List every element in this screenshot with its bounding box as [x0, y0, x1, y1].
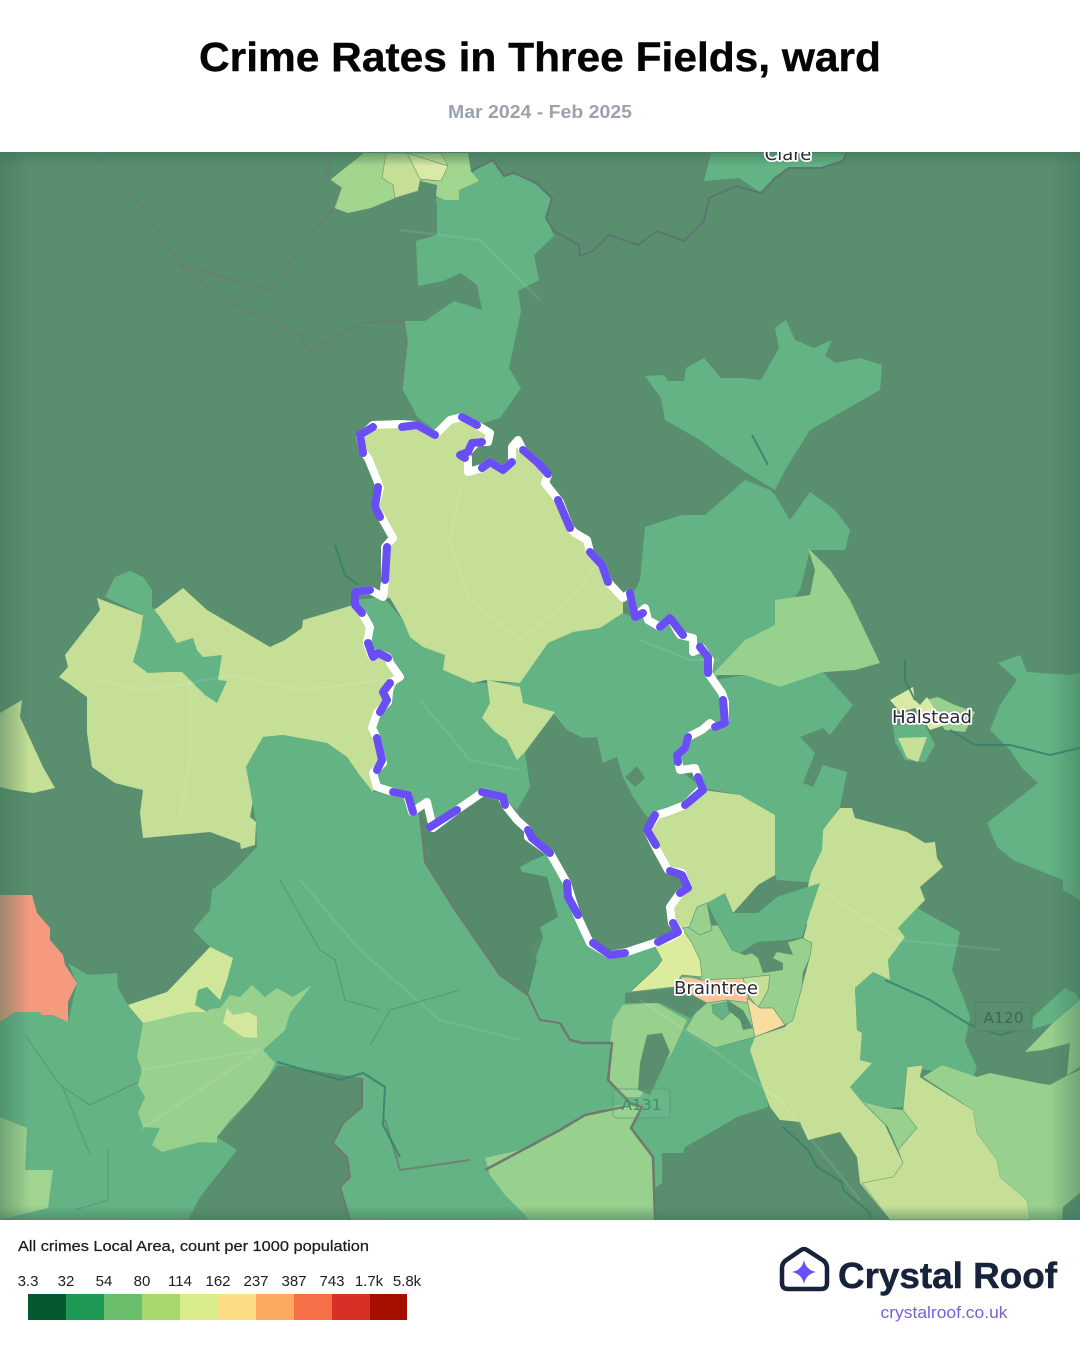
- road label: A131: A131: [621, 1096, 662, 1114]
- area: lime patch east of ward: [647, 790, 775, 932]
- area: Braintree west pale district: [610, 1003, 687, 1097]
- area: lower-left pale ward: [0, 1117, 53, 1220]
- area: top light cluster: [330, 153, 479, 213]
- area: ward central lime wedge: [482, 680, 555, 760]
- area: far-east mid-green district: [987, 655, 1080, 900]
- area: large south-west lime district: [59, 588, 400, 849]
- legend tick labels: 743: [319, 1273, 345, 1290]
- legend tick labels: 114: [168, 1273, 192, 1290]
- title: Crime Rates in Three Fields, ward: [199, 34, 881, 80]
- area: east edge wards: [1025, 988, 1080, 1075]
- place label: Clare: Clare: [765, 144, 811, 165]
- area: east pale district: [712, 548, 880, 687]
- area: dark square in ward: [625, 766, 645, 787]
- area: far-west lime district: [0, 700, 55, 793]
- area: small mid patch in lime ward: [195, 987, 220, 1012]
- ward boundary: Three Fields dashed outline: [355, 417, 725, 955]
- legend tick labels: 162: [205, 1273, 231, 1290]
- area: Clare district: [704, 153, 846, 193]
- legend: colour scale: [18, 1238, 422, 1320]
- area: south dark district: [188, 1065, 362, 1220]
- legend colour swatches: [28, 1294, 407, 1320]
- place label: Braintree: Braintree: [674, 978, 758, 999]
- area: ward southern dark extension: [420, 792, 558, 995]
- roads: pale lines: [97, 230, 1000, 1200]
- area: Braintree west dark slit: [638, 1033, 670, 1095]
- area: ward interior mid-green: [355, 597, 725, 828]
- legend tick labels: 387: [281, 1273, 307, 1290]
- place label: Halstead: Halstead: [892, 707, 972, 728]
- legend tick labels: [18, 1273, 422, 1290]
- subtitle: date range: Mar 2024 - Feb 2025: [448, 102, 632, 122]
- area: south-east lime ward: [862, 1065, 1030, 1220]
- area: south-east pale ward: [923, 1065, 1080, 1220]
- area: lime south-west ward: [128, 947, 233, 1023]
- area: large eastern lime strip: [750, 808, 943, 1220]
- area: mid-green patches inside lime district: [105, 571, 227, 703]
- road label: A120: [975, 1002, 1032, 1031]
- area: Halstead wards: [890, 687, 975, 762]
- area: ward northern lime: [360, 417, 623, 683]
- area: north mid-green district: [402, 160, 554, 431]
- legend tick labels: 237: [243, 1273, 269, 1290]
- map: crime rate choropleth: [0, 144, 1080, 1220]
- legend title: All crimes Local Area, count per 1000 population: [18, 1238, 369, 1255]
- area: thin ward outlines: [25, 880, 460, 1210]
- area: main southern mid-green: [0, 735, 768, 1220]
- vignette: [0, 152, 1080, 1220]
- area: small lime ward: [223, 1008, 257, 1038]
- county boundary lines: [95, 153, 846, 1220]
- icon: house with star: [782, 1249, 827, 1289]
- area: small pale ward in east: [863, 1102, 917, 1150]
- area: east mid-green district: [630, 480, 850, 680]
- legend tick labels: 80: [134, 1273, 150, 1290]
- logo: Crystal Roof: [782, 1249, 1058, 1322]
- road label: A131: [613, 1089, 670, 1118]
- area: ward east-side mid-green: [677, 672, 853, 883]
- legend tick labels: 3.3: [18, 1273, 38, 1290]
- logo website: crystalroof.co.uk: [880, 1304, 1008, 1322]
- legend tick labels: 1.7k: [355, 1273, 384, 1290]
- area: Braintree town wards: [625, 903, 812, 1048]
- legend tick labels: 54: [96, 1273, 112, 1290]
- area: Braintree north mid-green: [707, 883, 820, 953]
- area: pale south-west ward: [137, 985, 312, 1152]
- logo wordmark: Crystal Roof: [838, 1255, 1058, 1296]
- area: north-east mid-green district: [645, 320, 882, 490]
- rivers: [277, 435, 1080, 1220]
- area: east central mid-green: [850, 908, 977, 1108]
- area: salmon district: [0, 895, 77, 1022]
- legend tick labels: 5.8k: [393, 1273, 422, 1290]
- road label: A120: A120: [983, 1009, 1024, 1027]
- legend tick labels: 32: [58, 1273, 74, 1290]
- area: south pale district: [485, 1105, 655, 1220]
